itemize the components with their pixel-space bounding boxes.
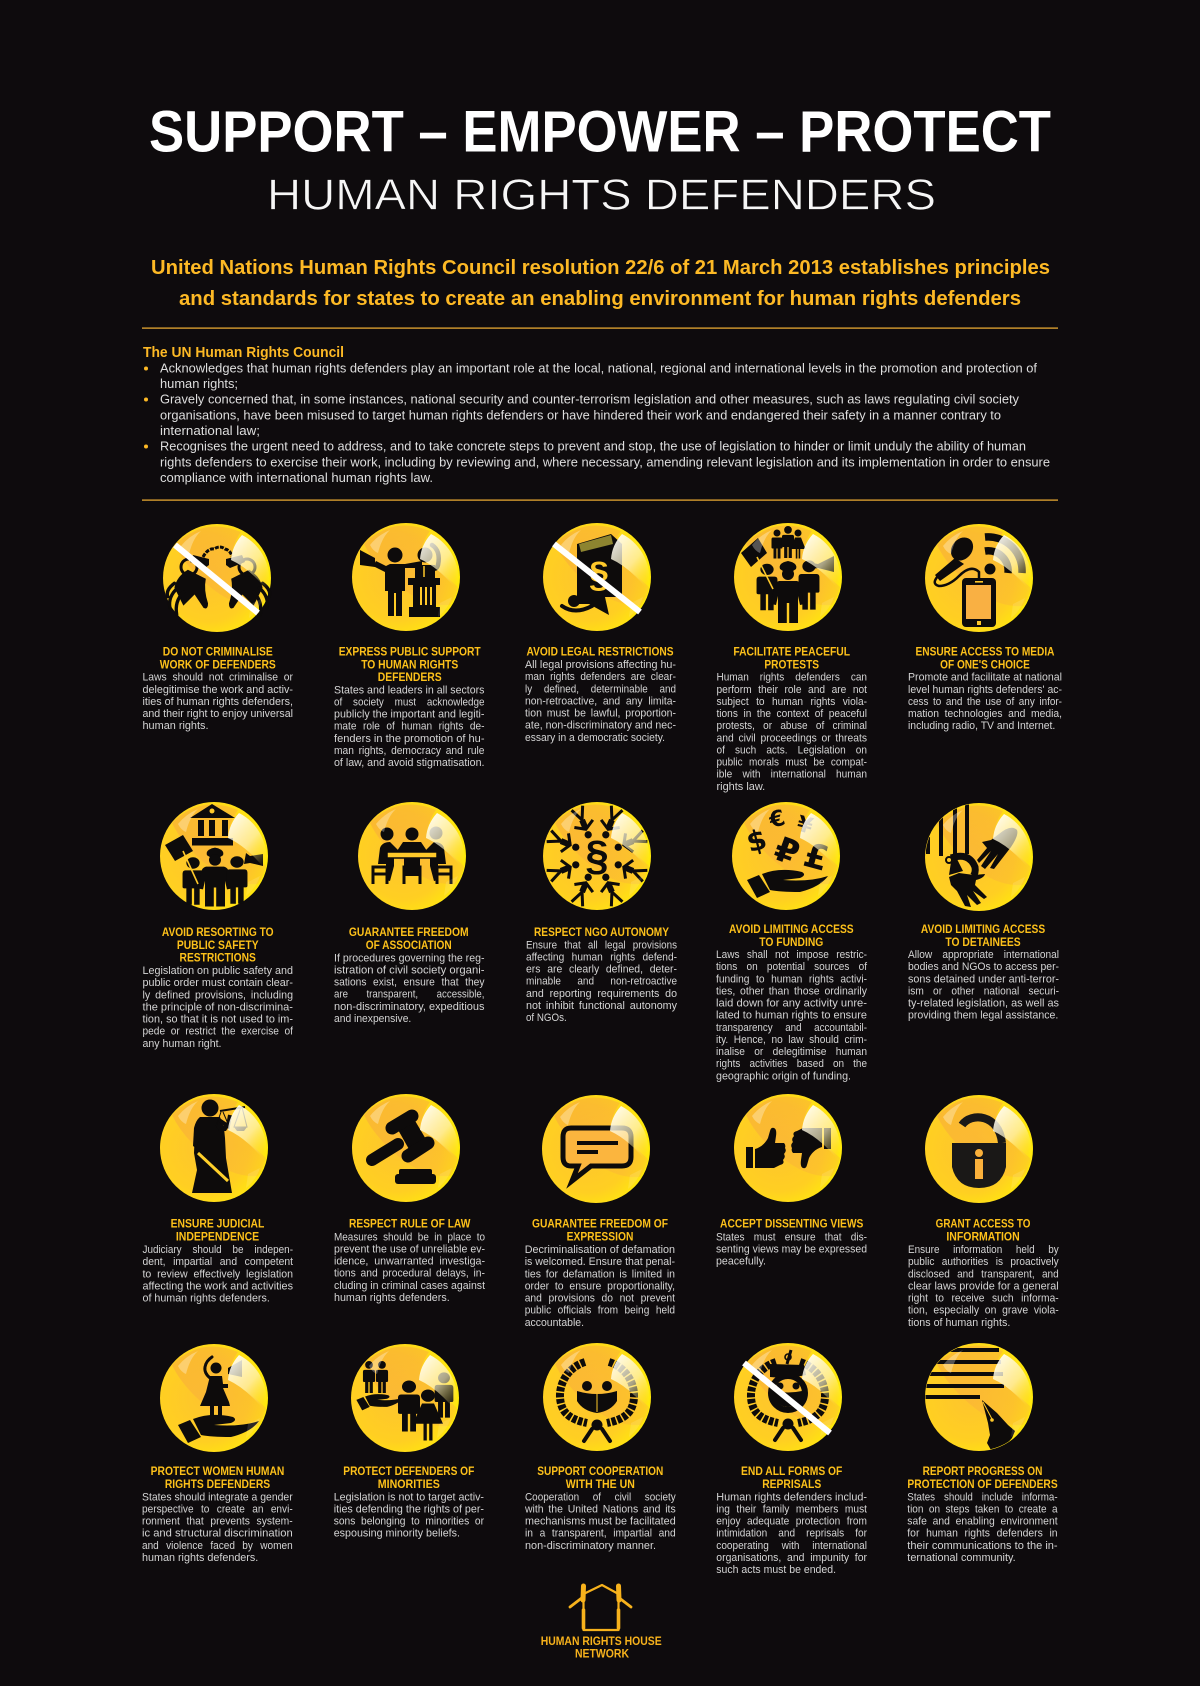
resolution statement: and standards for states to create an enabling environment for human rights defenders: [179, 288, 1021, 310]
icon: section sign surrounded by people: [543, 802, 651, 910]
body text: Decriminalisation of defamation: [525, 1244, 675, 1256]
body text: [716, 1231, 867, 1268]
body text: ities defending the rights of per-: [334, 1503, 484, 1515]
heading: TO DETAINEES: [945, 935, 1021, 949]
body text: ing their family members must: [716, 1503, 867, 1515]
heading: [339, 644, 481, 684]
icon: man with megaphone and speaker at podium: [352, 523, 460, 631]
heading: RESPECT RULE OF LAW: [349, 1217, 471, 1231]
heading: RIGHTS DEFENDERS: [165, 1477, 270, 1491]
body text: Measures should be in place to: [334, 1231, 485, 1243]
body text: [334, 1491, 484, 1540]
body text: cooperating with international: [716, 1540, 867, 1552]
body text: All legal provisions affecting hu-: [525, 659, 676, 671]
heading: RESTRICTIONS: [180, 951, 256, 965]
heading: INDEPENDENCE: [176, 1229, 259, 1243]
heading: END ALL FORMS OF: [741, 1464, 842, 1478]
panel: do not criminalise: [142, 524, 293, 732]
logo: Human Rights House Network: [541, 1585, 662, 1660]
heading: SUPPORT COOPERATION: [537, 1464, 663, 1478]
body text: delegitimise the work and activ-: [142, 684, 293, 696]
body text: man rights defenders are clear-: [525, 671, 676, 683]
intro bullets: Gravely concerned that, in some instances, national security and counter-terrorism legislation and other measures, such as laws regulating civil society: [160, 393, 1020, 407]
body text: [334, 952, 485, 1025]
panel: respect NGO autonomy: [526, 802, 677, 1024]
body text: [334, 1231, 485, 1304]
body text: ronment that prevents system-: [142, 1516, 293, 1528]
heading: PROTESTS: [764, 657, 819, 671]
heading: [171, 1217, 264, 1244]
body text: geographic origin of funding.: [716, 1070, 851, 1082]
icon: law book crushing a person, struck through: §: [589, 554, 609, 595]
body text: Legislation is not to target activ-: [334, 1491, 484, 1503]
icon: house formed by two figures: [570, 1585, 631, 1630]
body text: tion must be lawful, proportion-: [525, 708, 676, 720]
panel: avoid limiting access to detainees: [908, 797, 1059, 1022]
heading: [160, 644, 276, 671]
body text: [908, 672, 1062, 732]
icon: currency symbols above open hand: ¥: [794, 812, 816, 840]
body text: subject to human rights viola-: [716, 696, 867, 708]
heading: PROTECTION OF DEFENDERS: [907, 1477, 1058, 1491]
body text: tion, so that it is not used to im-: [142, 1014, 293, 1026]
panel: avoid limiting access to funding: [716, 802, 868, 1082]
body text: clear laws provide for a general: [908, 1280, 1059, 1292]
body text: Promote and facilitate at national: [908, 672, 1062, 684]
heading: GRANT ACCESS TO: [936, 1217, 1030, 1231]
body text: of human rights defenders.: [142, 1292, 270, 1304]
icon: law book crushing a person, struck through: [543, 523, 651, 631]
heading: [936, 1217, 1030, 1244]
icon: handcuffed hands struck through: [163, 524, 271, 632]
body text: bodies and NGOs to access per-: [908, 961, 1059, 973]
heading: OF ASSOCIATION: [366, 938, 452, 952]
body text: affecting human rights defend-: [526, 951, 677, 963]
heading: [729, 922, 854, 949]
intro bullets: Recognises the urgent need to address, and to take concrete steps to prevent and stop, the use of legislation to hinder or limit unduly the ability of human: [160, 440, 1026, 454]
icon: lady justice with scales and sword: [160, 1094, 268, 1202]
body text: Judiciary should be indepen-: [142, 1244, 293, 1256]
body text: [716, 672, 867, 793]
body text: States must ensure that dis-: [716, 1231, 867, 1243]
body text: ties for defamation is limited in: [525, 1268, 675, 1280]
body text: cess to and the use of any infor-: [908, 696, 1062, 708]
intro bullets: compliance with international human rights law.: [160, 471, 433, 485]
heading: WITH THE UN: [566, 1477, 635, 1491]
heading: [343, 1464, 474, 1491]
logo text: [541, 1634, 662, 1660]
icon: speech bubble: [542, 1095, 650, 1203]
body text: transparency and accountabil-: [716, 1022, 867, 1034]
heading: GUARANTEE FREEDOM OF: [532, 1217, 668, 1231]
body text: organisations, and impunity for: [716, 1552, 867, 1564]
body text: pede or restrict the exercise of: [142, 1026, 294, 1038]
heading: REPORT PROGRESS ON: [923, 1464, 1042, 1478]
body text: human rights defenders.: [334, 1292, 450, 1304]
body text: ic and structural discrimination: [142, 1528, 293, 1540]
body text: ism or other national securi-: [908, 985, 1059, 997]
body text: ly defined, determinable and: [525, 683, 676, 695]
icon: currency symbols above open hand: $: [743, 822, 770, 859]
body text: [908, 949, 1059, 1022]
icon: public building above protesters and police: [160, 802, 268, 910]
heading: FACILITATE PEACEFUL: [733, 644, 850, 658]
body text: of law, and avoid stigmatisation.: [334, 757, 484, 769]
heading: [733, 644, 850, 671]
panel: facilitate peaceful protests: [716, 523, 867, 793]
heading: EXPRESS PUBLIC SUPPORT: [339, 644, 481, 658]
body text: not inhibit functional autonomy: [526, 1000, 677, 1012]
body text: States should include informa-: [907, 1491, 1058, 1503]
body text: rights law.: [716, 781, 765, 793]
body text: rights activities based on the: [716, 1058, 867, 1070]
intro bullets: [144, 362, 1050, 485]
body text: ers are clearly defined, deter-: [526, 964, 677, 976]
body text: human rights defenders.: [142, 1552, 258, 1564]
icon: judge's gavel: [352, 1094, 460, 1202]
body text: States should integrate a gender: [142, 1491, 293, 1503]
heading: AVOID LIMITING ACCESS: [729, 922, 854, 936]
icon: fountain pen writing lines: [925, 1343, 1033, 1451]
body text: fenders in the promotion of hu-: [334, 733, 485, 745]
body text: [524, 1491, 676, 1552]
body text: [526, 939, 677, 1024]
panel: support cooperation with the UN: [524, 1343, 676, 1552]
panel: ensure access to media: [908, 524, 1062, 732]
body text: order to ensure proportionality,: [525, 1280, 675, 1292]
body text: Laws shall not impose restric-: [716, 949, 867, 961]
body text: such acts must be ended.: [716, 1564, 836, 1576]
body text: public officials from being held: [525, 1305, 675, 1317]
body text: ity. Hence, no law should crim-: [716, 1034, 867, 1046]
body text: tions of human rights.: [908, 1317, 1010, 1329]
body text: accountable.: [525, 1317, 584, 1329]
panel: report progress on protection of defenders: [907, 1343, 1058, 1564]
icon: thumbs up and thumbs down: [734, 1094, 842, 1202]
icon: currency symbols above open hand: £: [799, 835, 832, 880]
body text: Ensure information held by: [908, 1244, 1059, 1256]
heading: PUBLIC SAFETY: [177, 938, 259, 952]
body text: human rights.: [142, 720, 208, 732]
heading: PROTECT DEFENDERS OF: [343, 1464, 474, 1478]
logo text: NETWORK: [575, 1646, 629, 1660]
body text: providing them legal assistance.: [908, 1010, 1058, 1022]
body text: any human right.: [142, 1038, 222, 1050]
body text: Human rights defenders can: [716, 672, 867, 684]
body text: and provisions do not prevent: [525, 1292, 675, 1304]
icon: woman with megaphone on open hand: [160, 1344, 268, 1452]
icon: currency symbols above open hand: [732, 802, 840, 910]
resolution statement: United Nations Human Rights Council resolution 22/6 of 21 March 2013 establishes principles: [151, 257, 1050, 279]
body text: for human rights defenders in: [907, 1528, 1058, 1540]
body text: and inexpensive.: [334, 1013, 411, 1025]
body text: are transparent, accessible,: [334, 989, 484, 1001]
body text: their communications to the in-: [907, 1540, 1058, 1552]
heading: DO NOT CRIMINALISE: [163, 644, 273, 658]
heading: MINORITIES: [378, 1477, 440, 1491]
body text: non-discriminatory manner.: [525, 1540, 656, 1552]
panel: accept dissenting views: [716, 1094, 867, 1268]
heading: TO FUNDING: [759, 935, 823, 949]
intro bullets: Acknowledges that human rights defenders play an important role at the local, national, regional and international levels in the promotion and protection of: [160, 362, 1038, 376]
body text: sations exist, ensure that they: [334, 977, 485, 989]
body text: safe and enabling environment: [907, 1516, 1058, 1528]
body text: lated to human rights to ensure: [716, 1010, 867, 1022]
icon: people inside UN style laurel wreath: [543, 1343, 651, 1451]
heading: [162, 925, 274, 965]
heading: PROTECT WOMEN HUMAN: [151, 1464, 284, 1478]
body text: Ensure that all legal provisions: [526, 939, 677, 951]
body text: disclosed and transparent, and: [908, 1268, 1059, 1280]
body text: public morals must be compat-: [716, 757, 867, 769]
body text: Human rights defenders includ-: [716, 1491, 867, 1503]
body text: of such acts. Legislation on: [716, 745, 867, 757]
panel: grant access to information: [908, 1095, 1059, 1329]
body text: prevent the use of unreliable ev-: [334, 1243, 485, 1255]
body text: [908, 1244, 1059, 1329]
icon: figures on hand beside a family group: [351, 1344, 459, 1452]
icon: microphone, wifi signal and smartphone: [925, 524, 1033, 632]
body text: laid down for any activity unre-: [716, 998, 867, 1010]
icon: three people meeting at a table: [358, 802, 466, 910]
body text: enjoy adequate protection from: [716, 1516, 867, 1528]
intro bullets: rights defenders to exercise their work, including by reviewing and, where necessary, amending relevant legislation and its implementation in order to ensure: [160, 455, 1050, 469]
heading: [921, 922, 1045, 949]
body text: of NGOs.: [526, 1012, 567, 1024]
body text: istration of civil society organi-: [334, 964, 485, 976]
body text: inalise or delegitimise human: [716, 1046, 867, 1058]
body text: perform their role and are not: [716, 684, 867, 696]
heading: [537, 1464, 663, 1491]
body text: ties, other than those ordinarily: [716, 985, 867, 997]
icon: open padlock with information sign: [925, 1095, 1033, 1203]
body text: in a transparent, impartial and: [525, 1528, 676, 1540]
body text: intimidation and reprisals for: [716, 1528, 867, 1540]
body text: dent, impartial and competent: [142, 1256, 293, 1268]
body text: perspective to create an envi-: [142, 1503, 293, 1515]
panel: guarantee freedom of association: [334, 802, 485, 1025]
panel: ensure judicial independence: [142, 1094, 293, 1304]
body text: minable and non-retroactive: [526, 976, 677, 988]
heading: REPRISALS: [762, 1477, 821, 1491]
introduction block: [143, 345, 1050, 485]
subtitle: HUMAN RIGHTS DEFENDERS: [267, 170, 936, 220]
body text: mechanisms must be facilitated: [525, 1516, 676, 1528]
heading: [532, 1217, 668, 1244]
heading: AVOID LEGAL RESTRICTIONS: [526, 644, 674, 658]
body text: ities of human rights defenders,: [142, 696, 293, 708]
body text: and civil proceedings or threats: [716, 732, 867, 744]
body text: [907, 1491, 1058, 1564]
heading: ENSURE ACCESS TO MEDIA: [916, 644, 1055, 658]
body text: public authorities is proactively: [908, 1256, 1059, 1268]
body text: and violence faced by women: [142, 1540, 293, 1552]
body text: man rights, democracy and rule: [334, 745, 484, 757]
heading: AVOID LIMITING ACCESS: [921, 922, 1045, 936]
body text: public order must contain clear-: [142, 977, 293, 989]
icon: prison bars, handcuff and reaching hands: [925, 797, 1033, 911]
body text: idence, unwarranted investiga-: [334, 1256, 485, 1268]
body text: [525, 1244, 675, 1329]
heading: RESPECT NGO AUTONOMY: [534, 925, 669, 939]
panel: guarantee freedom of expression: [525, 1095, 675, 1329]
body text: mate role of human rights de-: [334, 721, 485, 733]
body text: [142, 1244, 293, 1304]
body text: Laws should not criminalise or: [142, 672, 293, 684]
intro bullets: international law;: [160, 424, 260, 438]
body text: with the United Nations and its: [524, 1503, 676, 1515]
heading: ENSURE JUDICIAL: [171, 1217, 264, 1231]
icon: wreath with weight on chain, struck through: [734, 1343, 842, 1451]
body text: Cooperation of civil society: [525, 1491, 676, 1503]
resolution statement: [151, 257, 1050, 310]
body text: tion on steps taken to create a: [907, 1503, 1058, 1515]
body text: [525, 659, 676, 744]
body text: level human rights defenders' ac-: [908, 684, 1062, 696]
intro heading: The UN Human Rights Council: [143, 345, 344, 361]
heading: OF ONE'S CHOICE: [940, 657, 1030, 671]
body text: publicly the important and legiti-: [334, 709, 485, 721]
body text: affecting the work and activities: [142, 1280, 293, 1292]
heading: [151, 1464, 284, 1491]
body text: protests, or abuse of criminal: [716, 720, 867, 732]
body text: espousing minority beliefs.: [334, 1528, 460, 1540]
body text: peacefully.: [716, 1256, 766, 1268]
panel: end all forms of reprisals: [716, 1343, 867, 1576]
heading: [907, 1464, 1058, 1491]
intro bullets: human rights;: [160, 377, 238, 391]
panel: express public support: [334, 523, 485, 769]
body text: Allow appropriate international: [908, 949, 1059, 961]
body text: right to receive such informa-: [908, 1292, 1059, 1304]
body text: ty-related legislation, as well as: [908, 998, 1059, 1010]
body text: ly defined provisions, including: [142, 989, 293, 1001]
body text: If procedures governing the reg-: [334, 952, 485, 964]
body text: cluding in criminal cases against: [334, 1280, 485, 1292]
body text: of society must acknowledge: [334, 696, 484, 708]
body text: tions on potential sources of: [716, 961, 868, 973]
heading: TO HUMAN RIGHTS: [361, 657, 458, 671]
heading: INFORMATION: [946, 1229, 1020, 1243]
body text: Legislation on public safety and: [142, 965, 293, 977]
body text: sons detained under anti-terror-: [908, 973, 1059, 985]
body text: essary in a democratic society.: [525, 732, 665, 744]
body text: to review effectively legislation: [142, 1268, 293, 1280]
intro bullets: organisations, have been misused to target human rights defenders or have hindered their work and endangered their safety in a manner contrary to: [160, 408, 1001, 422]
panel: respect rule of law: [334, 1094, 485, 1304]
title: SUPPORT – EMPOWER – PROTECT: [149, 100, 1051, 164]
body text: sons belonging to minorities or: [334, 1516, 484, 1528]
body text: mation technologies and media,: [908, 708, 1062, 720]
body text: and reporting requirements do: [526, 988, 677, 1000]
heading: GUARANTEE FREEDOM: [349, 925, 469, 939]
body text: [142, 965, 294, 1050]
body text: [142, 1491, 293, 1564]
body text: [716, 1491, 867, 1576]
panel: avoid legal restrictions: [525, 523, 676, 744]
body text: the principle of non-discrimina-: [142, 1001, 293, 1013]
panel: avoid resorting to public safety restrictions: [142, 802, 294, 1050]
icon: currency symbols above open hand: ₽: [769, 829, 805, 875]
body text: non-retroactive, and any limita-: [525, 695, 676, 707]
body text: including radio, TV and Internet.: [908, 720, 1055, 732]
body text: ternational community.: [907, 1552, 1016, 1564]
icon: protesters, police officer and family: [734, 523, 842, 631]
icon: currency symbols above open hand: €: [766, 806, 788, 834]
body text: is welcomed. Ensure that penal-: [525, 1256, 675, 1268]
logo text: HUMAN RIGHTS HOUSE: [541, 1634, 662, 1648]
body text: [334, 684, 485, 769]
body text: tion, especially on grave viola-: [908, 1305, 1059, 1317]
heading: AVOID RESORTING TO: [162, 925, 274, 939]
body text: tions in the context of peaceful: [716, 708, 867, 720]
heading: [349, 925, 469, 952]
body text: senting views may be expressed: [716, 1243, 867, 1255]
heading: EXPRESSION: [567, 1229, 633, 1243]
body text: [142, 672, 293, 732]
body text: [716, 949, 868, 1082]
heading: [741, 1464, 842, 1491]
heading: ACCEPT DISSENTING VIEWS: [720, 1217, 863, 1231]
heading: [916, 644, 1055, 671]
body text: funding to human rights activi-: [716, 973, 867, 985]
body text: ible with international human: [716, 769, 867, 781]
panel: protect defenders of minorities: [334, 1344, 484, 1540]
icon: section sign surrounded by people: §: [585, 832, 609, 879]
body text: non-discriminatory, expeditious: [334, 1001, 485, 1013]
body text: ate, non-discriminatory and nec-: [525, 720, 676, 732]
heading: WORK OF DEFENDERS: [160, 657, 276, 671]
heading: DEFENDERS: [378, 670, 442, 684]
body text: tions and procedural delays, in-: [334, 1268, 485, 1280]
body text: and their right to enjoy universal: [142, 708, 293, 720]
body text: States and leaders in all sectors: [334, 684, 485, 696]
panel: protect women human rights defenders: [142, 1344, 293, 1564]
